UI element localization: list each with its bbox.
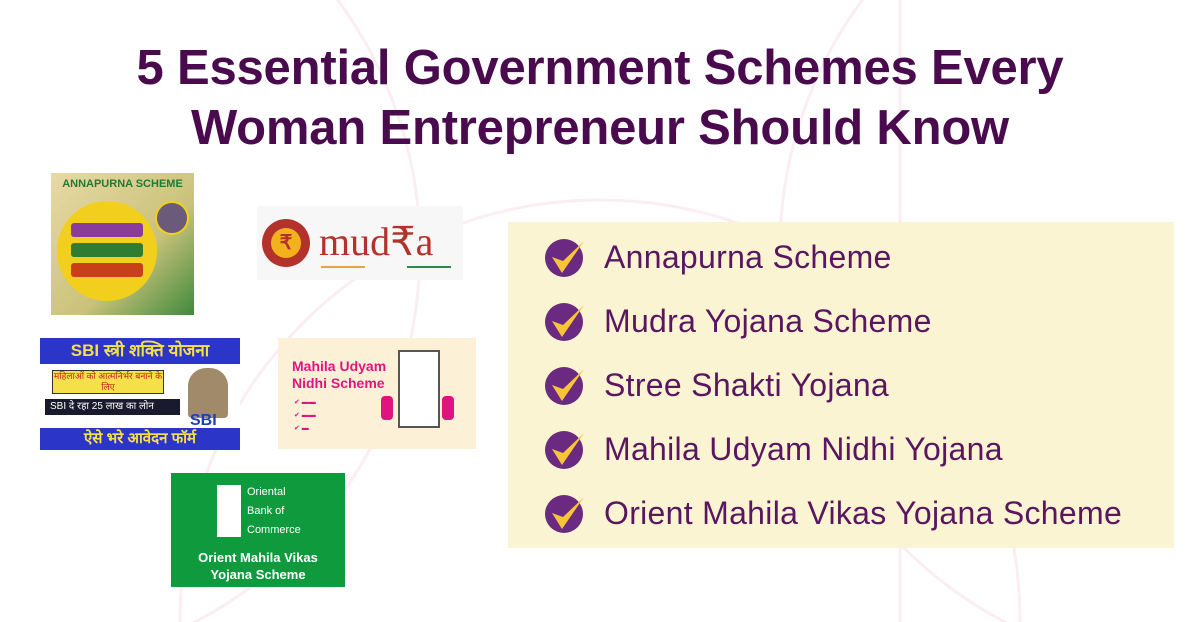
panel: scheme list [508,222,1174,548]
title [136,41,1064,155]
image: mudra logo [257,206,463,280]
image: annapurna scheme: ANNAPURNA SCHEME [62,178,183,190]
image: oriental bank: Bank of [247,505,284,517]
image: SBI stree shakti [40,338,240,450]
image: SBI stree shakti: महिलाओं को आत्मनिर्भर बनाने के लिए [54,371,162,392]
image: SBI stree shakti: ऐसे भरे आवेदन फॉर्म [84,430,196,447]
image: mudra logo: mud₹a [319,219,433,264]
image: mahila udyam nidhi: Mahila Udyam [292,358,386,374]
image: oriental bank: Yojana Scheme [210,567,306,582]
image: mahila udyam nidhi: ✔ ▬ [294,425,309,432]
image: annapurna scheme [51,173,194,315]
image: mahila udyam nidhi [278,338,476,449]
image: mahila udyam nidhi: ✔ ▬▬ [294,399,316,406]
image: oriental bank: Orient Mahila Vikas [198,550,318,565]
item 4: Mahila Udyam Nidhi Yojana [604,430,1003,466]
item 3: Stree Shakti Yojana [604,366,889,402]
title: Woman Entrepreneur Should Know [191,101,1009,155]
image: oriental bank [171,473,345,587]
item 2: Mudra Yojana Scheme [604,302,932,338]
image: mahila udyam nidhi: Nidhi Scheme [292,375,385,391]
item 1: Annapurna Scheme [604,238,892,274]
title: 5 Essential Government Schemes Every [136,41,1063,95]
image: SBI stree shakti: SBI स्त्री शक्ति योजना [71,341,209,360]
image: mudra logo: ₹ [280,232,292,254]
image: mahila udyam nidhi: ✔ ▬▬ [294,412,316,419]
item 5: Orient Mahila Vikas Yojana Scheme [604,494,1122,530]
image: SBI stree shakti: SBI [190,412,217,429]
image: oriental bank: Oriental [247,486,286,498]
image: oriental bank: Commerce [247,524,301,536]
image: SBI stree shakti: SBI दे रहा 25 लाख का लोन [50,401,154,412]
